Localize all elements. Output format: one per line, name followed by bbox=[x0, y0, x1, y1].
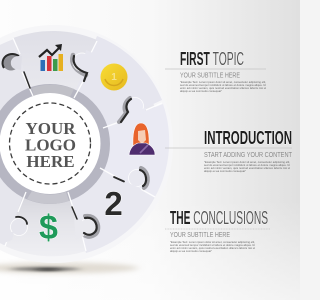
jigsaw knob: dollar into two bbox=[72, 207, 98, 240]
jigsaw knob: woman into coin bbox=[119, 98, 146, 125]
jigsaw knob: left into dollar bbox=[4, 217, 28, 243]
text block: first topic bbox=[165, 49, 266, 93]
body text: sed do eiusmod tempor incididunt ut labore et dolore magna aliqua. Ut bbox=[170, 243, 255, 247]
body text bbox=[204, 160, 290, 173]
body text bbox=[170, 240, 255, 253]
text block: the conclusions bbox=[165, 208, 270, 253]
body text: "Example Text: Lorem ipsum dolor sit amet, consectetur adipiscing elit, bbox=[180, 80, 266, 84]
body text: "Example Text: Lorem ipsum dolor sit amet, consectetur adipiscing elit, bbox=[170, 240, 255, 244]
body text: aliquip ex ea commodo consequat" bbox=[170, 249, 212, 253]
ring segment: dollar bbox=[27, 191, 69, 204]
logo text: YOUR bbox=[25, 119, 76, 138]
subtitle: YOUR SUBTITLE HERE bbox=[170, 232, 230, 239]
body text: aliquip ex ea commodo consequat" bbox=[204, 169, 246, 173]
logo circle bbox=[0, 93, 100, 194]
logo text: HERE bbox=[26, 152, 75, 171]
floor shadow bbox=[0, 262, 138, 274]
outer pale rim bbox=[0, 25, 173, 263]
subtitle: YOUR SUBTITLE HERE bbox=[180, 72, 240, 80]
number two: 2 bbox=[104, 185, 123, 222]
jigsaw knob: left notch to chart bbox=[2, 54, 30, 88]
icon: dollar sign: $ bbox=[39, 209, 58, 247]
body text: enim ad minim veniam, quis nostrud exercitation ullamco laboris nisi ut bbox=[180, 86, 266, 90]
body text: enim ad minim veniam, quis nostrud exercitation ullamco laboris nisi ut bbox=[170, 246, 255, 250]
puzzle piece: chart bbox=[13, 31, 97, 93]
grey inner ring bbox=[0, 84, 110, 204]
body text: sed do eiusmod tempor incididunt ut labore et dolore magna aliqua. Ut bbox=[180, 83, 266, 87]
puzzle wheel bbox=[0, 25, 173, 263]
body text bbox=[180, 80, 266, 93]
puzzle piece: coin bbox=[74, 36, 162, 127]
puzzle piece: left bbox=[0, 33, 161, 255]
jigsaw knob: two into woman bbox=[114, 168, 148, 196]
body text: aliquip ex ea commodo consequat" bbox=[180, 89, 222, 93]
icon: bar chart bbox=[39, 44, 63, 71]
body text: "Example Text: Lorem ipsum dolor sit amet, consectetur adipiscing elit, bbox=[204, 160, 290, 164]
jigsaw knob: coin into chart bbox=[72, 50, 100, 81]
text block: introduction bbox=[165, 128, 293, 173]
body text: sed do eiusmod tempor incididunt ut labore et dolore magna aliqua. Ut bbox=[204, 163, 290, 167]
icon: gold coin bbox=[100, 64, 128, 90]
puzzle piece: number two bbox=[68, 168, 155, 253]
dashed ring bbox=[10, 103, 90, 184]
heading: FIRST TOPIC bbox=[180, 49, 244, 69]
puzzle piece: dollar bbox=[5, 190, 86, 256]
piece seams bbox=[5, 38, 162, 251]
body text: enim ad minim veniam, quis nostrud exercitation ullamco laboris nisi ut bbox=[204, 166, 290, 170]
icon: woman bbox=[129, 123, 155, 155]
icon: gold coin: 1 bbox=[111, 72, 117, 83]
ring segment: chart bbox=[32, 85, 74, 97]
puzzle piece: woman bbox=[100, 104, 169, 197]
logo text: LOGO bbox=[25, 136, 76, 154]
